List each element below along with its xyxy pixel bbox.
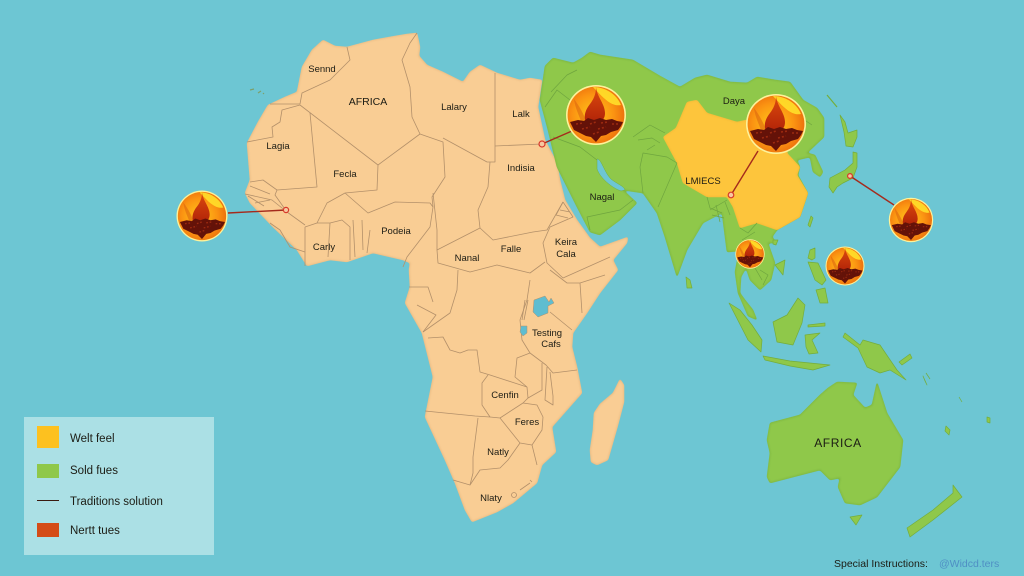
map labels xyxy=(266,64,862,504)
islands: Indonesia xyxy=(729,260,912,380)
map labels: Cafs xyxy=(541,339,561,350)
callout line: Japan xyxy=(848,174,894,205)
legend swatch: red xyxy=(37,523,59,537)
map labels: Sennd xyxy=(308,64,336,75)
footer handle: @Widcd.ters xyxy=(939,558,999,570)
gulf xyxy=(597,159,625,191)
map labels: Feres xyxy=(515,417,539,428)
legend swatch: yellow xyxy=(37,426,59,448)
icon: flame Japan xyxy=(889,198,933,242)
map labels: Nlaty xyxy=(480,493,502,504)
map labels: Keira xyxy=(555,237,578,248)
China region yellow xyxy=(663,100,808,230)
callout line: west Africa xyxy=(228,207,289,213)
lake Tanganyika xyxy=(520,326,527,336)
map labels: AFRICA xyxy=(349,96,387,108)
map labels: Lalk xyxy=(512,109,530,120)
island: Japan xyxy=(829,115,857,193)
legend label: line: Traditions solution xyxy=(70,496,163,508)
icon: flame China xyxy=(746,94,806,154)
Tasmania xyxy=(850,515,862,525)
legend label: green: Sold fues xyxy=(70,465,118,477)
map labels: Nagal xyxy=(590,192,614,203)
callout line: China xyxy=(728,151,758,198)
map labels: Cala xyxy=(556,249,576,260)
legend label: red: Nertt tues xyxy=(70,525,120,537)
map: Africa xyxy=(245,33,628,522)
Africa country borders xyxy=(245,33,610,498)
footer note: Special Instructions: xyxy=(834,558,928,570)
map labels: Podeia xyxy=(381,226,412,237)
islands: Philippines xyxy=(808,248,828,303)
map labels: Cenfin xyxy=(491,390,519,401)
New Zealand xyxy=(907,485,962,537)
map labels: AFRICA xyxy=(814,436,862,450)
icon: flame Arabia xyxy=(566,85,626,145)
map labels: Daya xyxy=(723,96,746,107)
map labels: Carly xyxy=(313,242,335,253)
map labels: Natly xyxy=(487,447,509,458)
lake Victoria xyxy=(533,296,554,317)
islands: Sri Lanka Hainan Taiwan xyxy=(686,216,813,288)
map: Australia and New Zealand xyxy=(767,373,990,537)
Africa landmass xyxy=(245,33,628,522)
icon: flame Philippines xyxy=(826,246,864,286)
map labels: Testing xyxy=(532,328,562,339)
map labels: Nanal xyxy=(455,253,479,264)
island: Sakhalin xyxy=(827,95,837,107)
Asia landmass green xyxy=(540,52,824,320)
legend label: yellow: Welt feel xyxy=(70,433,115,445)
icon: flame west Africa xyxy=(176,190,228,242)
map labels: Lalary xyxy=(441,102,467,113)
map labels: Indisia xyxy=(507,163,535,174)
map labels: Fecla xyxy=(333,169,357,180)
map: Asia xyxy=(540,52,912,380)
map labels: LMIECS xyxy=(685,176,721,187)
island: Madagascar xyxy=(590,379,624,465)
legend swatch: green xyxy=(37,464,59,478)
panel: legend xyxy=(24,417,214,555)
map labels: Lagia xyxy=(266,141,290,152)
Canary islands xyxy=(250,89,264,94)
legend swatch: line xyxy=(37,500,59,501)
icon: flame Indochina xyxy=(735,239,765,269)
Australia xyxy=(767,382,903,505)
Pacific islands xyxy=(923,373,990,435)
map labels: Falle xyxy=(501,244,521,255)
Asia country borders xyxy=(545,70,812,285)
callout line: Arabia xyxy=(539,131,572,147)
